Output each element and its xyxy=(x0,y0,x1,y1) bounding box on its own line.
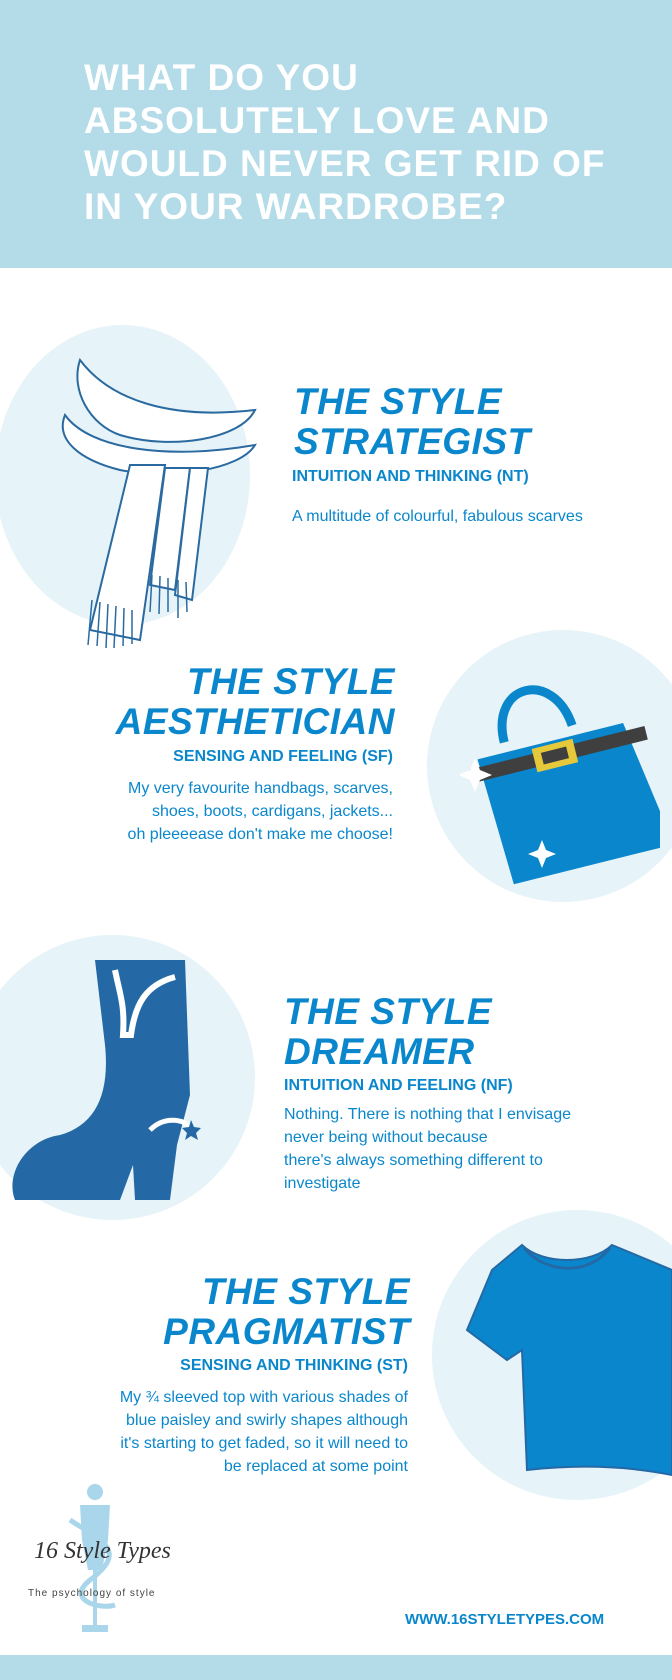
heading xyxy=(284,991,492,1072)
logo xyxy=(28,1484,171,1632)
body xyxy=(120,1389,408,1475)
circle bg xyxy=(432,1210,672,1500)
subtitle: INTUITION AND FEELING (NF) xyxy=(284,1077,513,1094)
panel: strategist xyxy=(0,325,583,648)
panel: aesthetician xyxy=(114,630,672,902)
title: WHAT DO YOU xyxy=(84,57,359,98)
heading: DREAMER xyxy=(284,1031,475,1072)
body: Nothing. There is nothing that I envisage xyxy=(284,1106,571,1123)
body: My very favourite handbags, scarves, xyxy=(128,780,393,797)
tagline: The psychology of style xyxy=(28,1588,156,1599)
heading: THE STYLE xyxy=(294,381,502,422)
body: investigate xyxy=(284,1175,360,1192)
heading xyxy=(294,381,533,462)
url: WWW.16STYLETYPES.COM xyxy=(405,1611,604,1628)
heading: STRATEGIST xyxy=(294,421,531,462)
body: oh pleeeease don't make me choose! xyxy=(128,826,393,843)
brand name: 16 Style Types xyxy=(34,1538,171,1564)
icon: mannequin xyxy=(68,1484,116,1632)
header band xyxy=(0,0,672,268)
title: WOULD NEVER GET RID OF xyxy=(84,143,606,184)
body: never being without because xyxy=(284,1129,488,1146)
body xyxy=(128,780,393,843)
heading xyxy=(114,661,396,742)
heading: AESTHETICIAN xyxy=(116,701,395,742)
subtitle: SENSING AND FEELING (SF) xyxy=(173,748,393,765)
title: ABSOLUTELY LOVE AND xyxy=(84,100,550,141)
body: A multitude of colourful, fabulous scarves xyxy=(292,508,583,525)
body: there's always something different to xyxy=(284,1152,543,1169)
icon: scarf xyxy=(62,358,257,648)
title: IN YOUR WARDROBE? xyxy=(84,186,507,227)
heading: PRAGMATIST xyxy=(163,1311,410,1352)
heading: THE STYLE xyxy=(284,991,492,1032)
title xyxy=(84,57,606,227)
icon: boot xyxy=(12,960,201,1200)
circle bg xyxy=(0,325,250,625)
body: it's starting to get faded, so it will need to xyxy=(120,1435,408,1452)
circle bg xyxy=(427,630,672,902)
subtitle: SENSING AND THINKING (ST) xyxy=(180,1357,408,1374)
icon: handbag xyxy=(460,685,660,884)
subtitle: INTUITION AND THINKING (NT) xyxy=(292,468,529,485)
icon: t-shirt xyxy=(466,1244,672,1476)
circle bg xyxy=(0,935,255,1220)
heading: THE STYLE xyxy=(202,1271,410,1312)
body: My ¾ sleeved top with various shades of xyxy=(120,1389,408,1406)
footer band xyxy=(0,1655,672,1680)
body xyxy=(284,1106,571,1192)
heading xyxy=(163,1271,412,1352)
body: shoes, boots, cardigans, jackets... xyxy=(152,803,393,820)
body: blue paisley and swirly shapes although xyxy=(126,1412,408,1429)
panel: pragmatist xyxy=(120,1210,672,1500)
heading: THE STYLE xyxy=(187,661,395,702)
body: be replaced at some point xyxy=(224,1458,408,1475)
panel: dreamer xyxy=(0,935,571,1220)
